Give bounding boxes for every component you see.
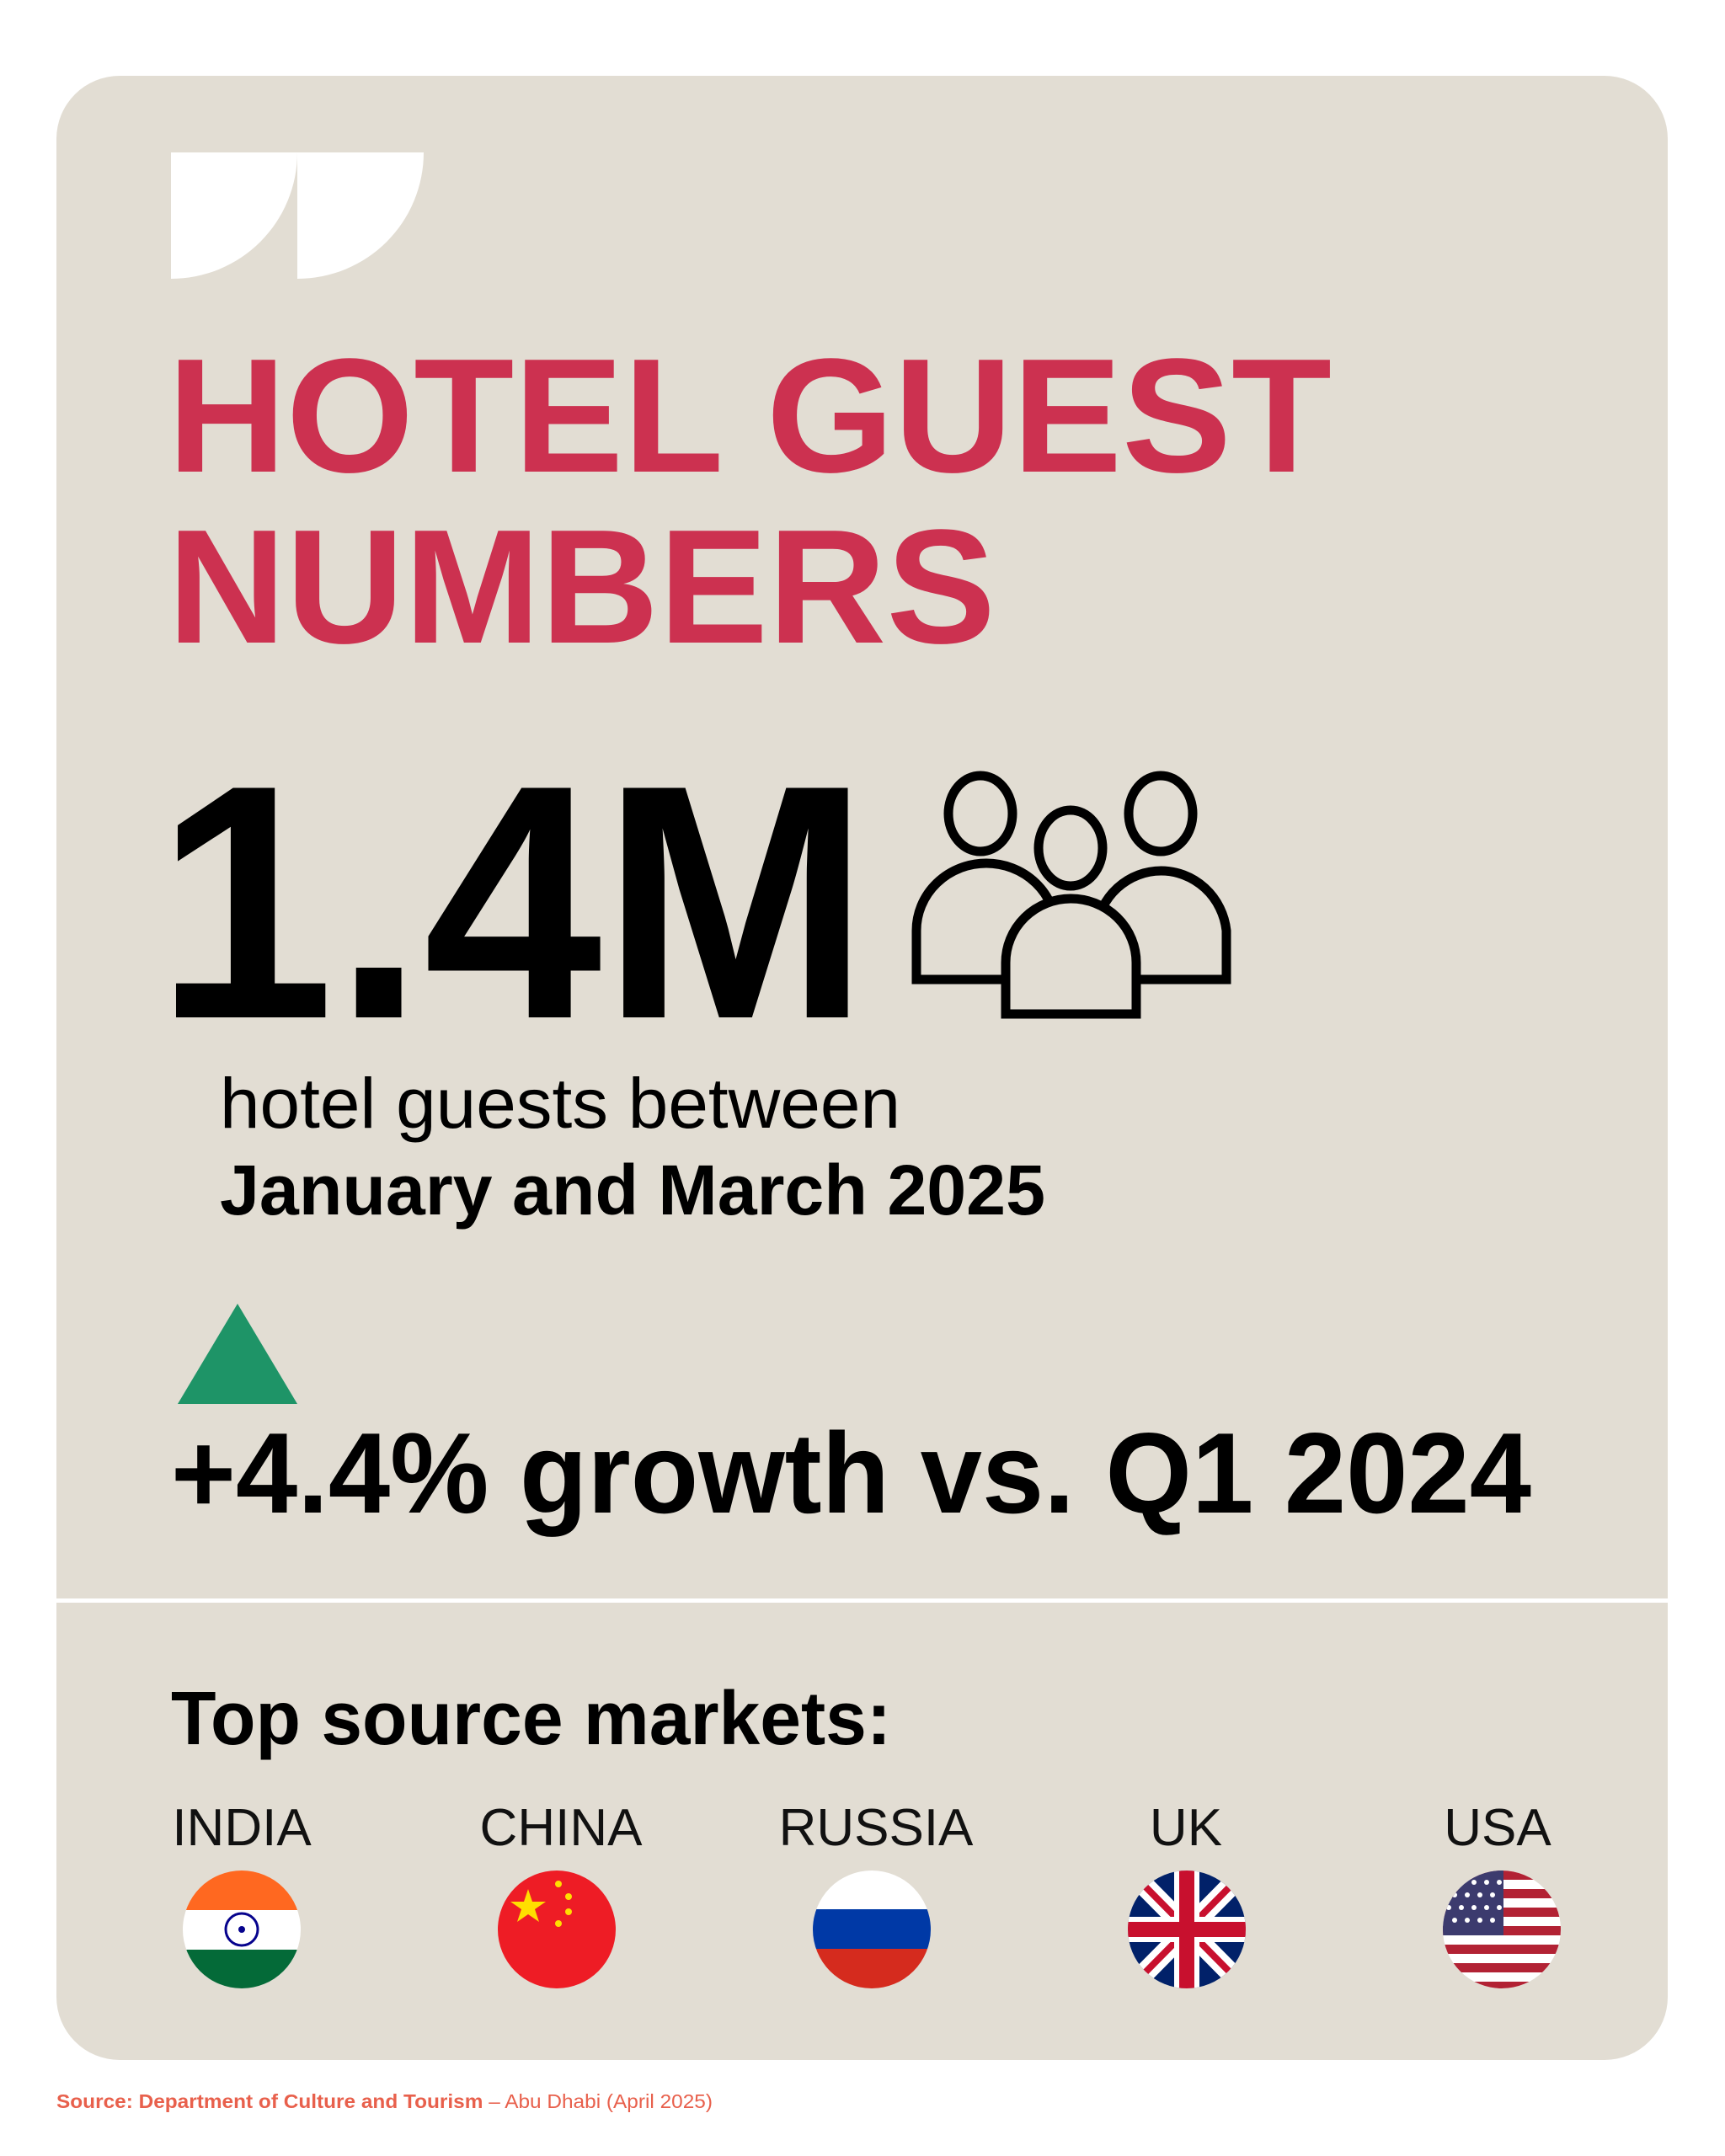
flag: UK (1128, 1870, 1246, 1988)
text block: subtitle: hotel guests between (220, 1064, 900, 1143)
icon: people (916, 776, 1226, 1014)
country labels: CHINA (480, 1799, 643, 1857)
title: HOTEL GUEST (168, 324, 1332, 506)
growth stat: +4.4% growth vs. Q1 2024 (171, 1409, 1531, 1537)
source note: Source: Department of Culture and Tourism – Abu Dhabi (April 2025) (56, 2090, 713, 2112)
title: NUMBERS (168, 495, 996, 677)
big number: 1.4M (156, 716, 869, 1088)
flag: Russia (813, 1870, 931, 1988)
country labels: INDIA (172, 1799, 312, 1857)
heading: top source markets: Top source markets: (171, 1677, 891, 1761)
icon: quote marks (171, 152, 424, 279)
country labels: RUSSIA (779, 1799, 974, 1857)
title (168, 324, 1332, 677)
text block: subtitle (220, 1064, 1045, 1230)
flag: China (498, 1870, 616, 1988)
country labels (172, 1799, 1551, 1857)
flag: India (183, 1870, 301, 1988)
country labels: UK (1150, 1799, 1222, 1857)
icon: up triangle (178, 1304, 297, 1404)
country labels: USA (1444, 1799, 1551, 1857)
text block: subtitle: January and March 2025 (220, 1150, 1045, 1230)
flag: USA (1443, 1870, 1561, 1988)
